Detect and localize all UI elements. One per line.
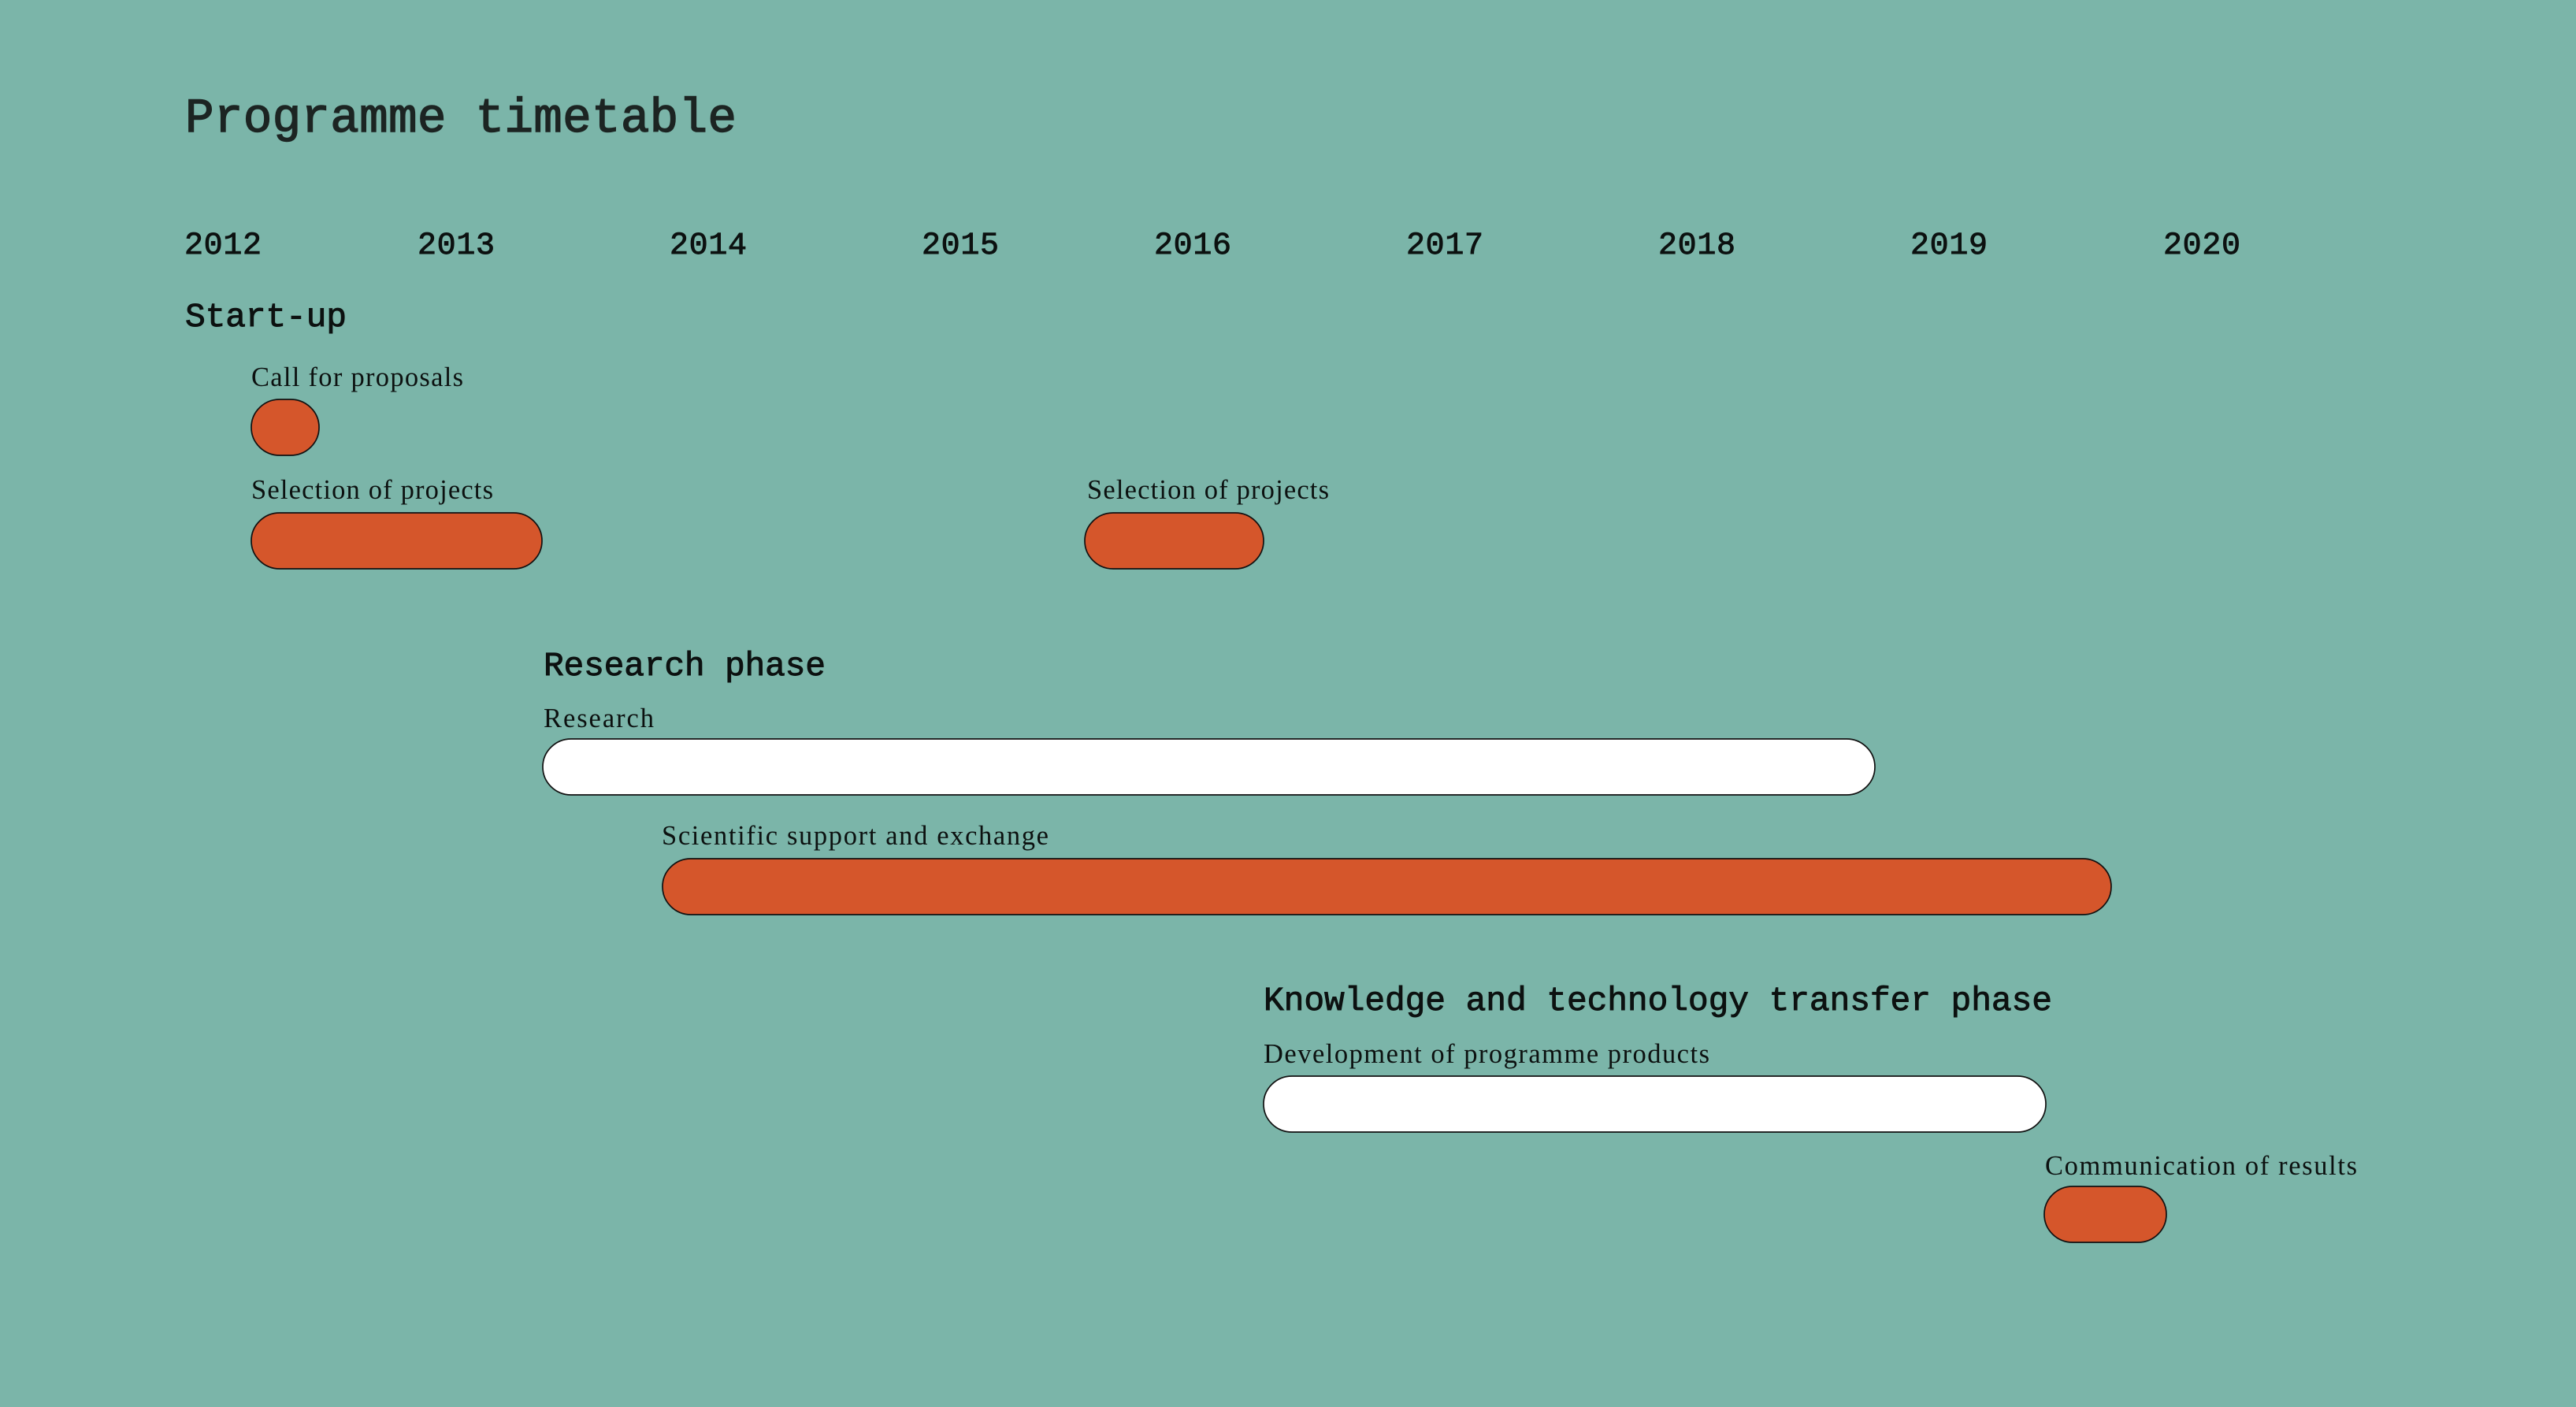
panel: research phase xyxy=(543,647,2111,915)
year 2014: 2014 xyxy=(670,228,747,264)
title: Programme timetable xyxy=(185,92,737,147)
year 2018: 2018 xyxy=(1658,228,1735,264)
year 2013: 2013 xyxy=(418,228,495,264)
label: communication of results: Communication of results xyxy=(2045,1151,2357,1181)
panel: start-up phase xyxy=(185,298,1329,569)
heading: knowledge and technology transfer phase: Knowledge and technology transfer phase xyxy=(1264,982,2052,1020)
year 2015: 2015 xyxy=(922,228,999,264)
panel: knowledge and technology transfer phase xyxy=(1264,982,2357,1242)
bar: communication of results xyxy=(2044,1186,2166,1242)
bar: research xyxy=(543,739,1875,795)
year 2017: 2017 xyxy=(1406,228,1483,264)
year axis xyxy=(184,228,2240,264)
label: selection of projects: Selection of projects xyxy=(251,475,493,505)
year 2020: 2020 xyxy=(2163,228,2240,264)
bar: scientific support and exchange xyxy=(663,859,2111,915)
heading: research phase: Research phase xyxy=(544,647,826,685)
year 2016: 2016 xyxy=(1154,228,1231,264)
year 2012: 2012 xyxy=(184,228,262,264)
bar: call for proposals xyxy=(251,399,319,455)
year 2019: 2019 xyxy=(1910,228,1988,264)
label: selection of projects second round: Selection of projects xyxy=(1087,475,1329,505)
bar: development of programme products xyxy=(1264,1076,2046,1132)
label: development of programme products: Development of programme products xyxy=(1264,1039,1709,1069)
heading: start-up: Start-up xyxy=(185,298,347,336)
bar: selection of projects second round xyxy=(1085,513,1264,569)
label: call for proposals: Call for proposals xyxy=(251,362,463,392)
label: scientific support and exchange: Scientific support and exchange xyxy=(662,821,1049,851)
label: research: Research xyxy=(544,704,654,733)
bar: selection of projects xyxy=(251,513,542,569)
